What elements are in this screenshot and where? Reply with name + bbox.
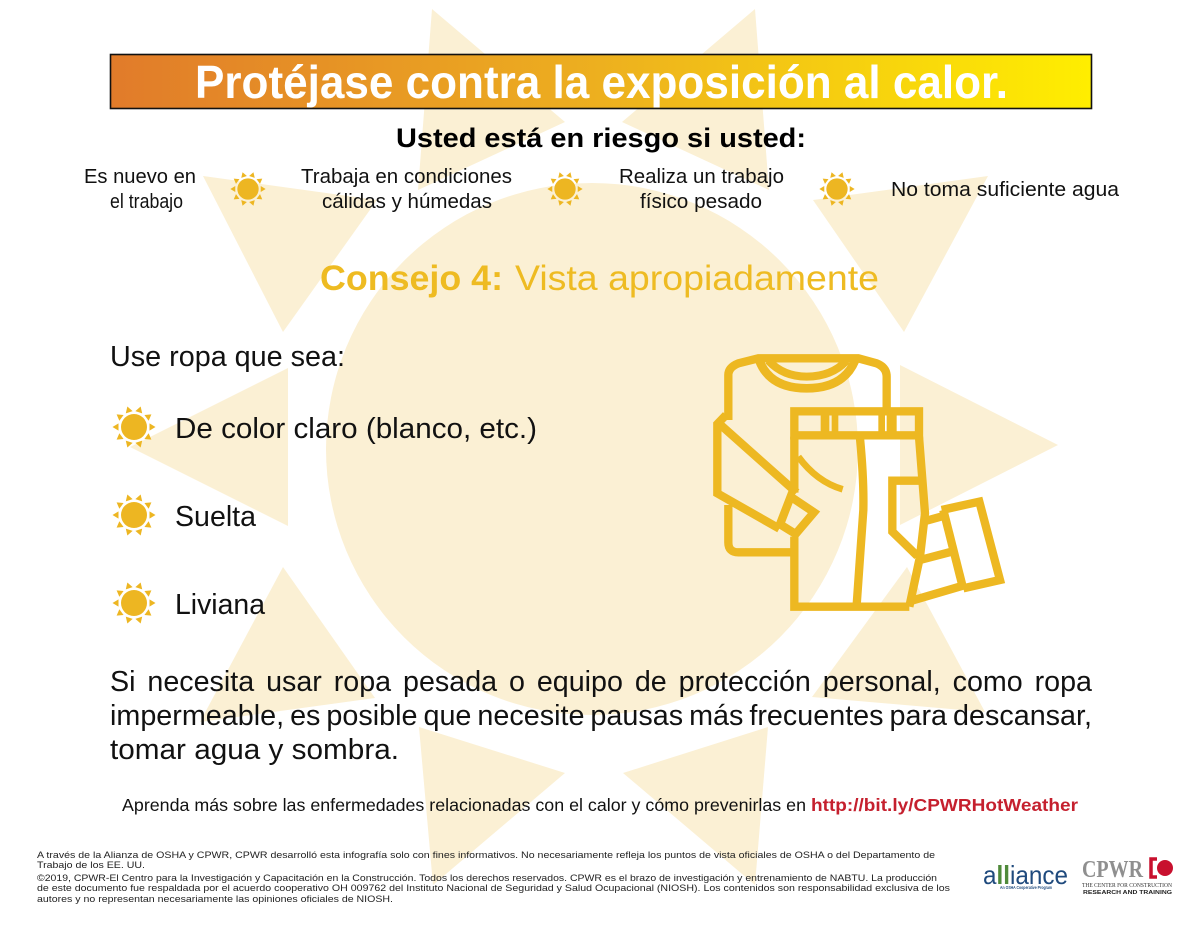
folded garment xyxy=(912,502,1000,601)
list item: light color: De color claro (blanco, etc.) xyxy=(175,413,537,445)
icon: small sun 1 xyxy=(230,171,266,207)
icon: small sun 3 xyxy=(819,171,855,207)
logo: alliance: alliance xyxy=(983,860,1068,890)
link: http://bit.ly/CPWRHotWeather xyxy=(811,795,1078,815)
trousers xyxy=(794,411,925,607)
icon: list sun 3 xyxy=(112,581,156,625)
shirt body xyxy=(717,358,887,552)
list item: loose: Suelta xyxy=(175,501,257,533)
risk factors row xyxy=(84,166,1120,213)
risk: heavy physical work: Realiza un trabajo xyxy=(619,166,784,188)
icon: small sun 2 xyxy=(547,171,583,207)
logo: alliance: An OSHA Cooperative Program xyxy=(1000,885,1052,890)
footer disclaimer xyxy=(37,850,950,904)
footer disclaimer: autores y no representan necesariamente las opiniones oficiales de NIOSH. xyxy=(37,894,393,904)
risk: heavy physical work xyxy=(619,166,784,213)
tip heading: Consejo 4: xyxy=(320,259,503,298)
heavy clothing paragraph: tomar agua y sombra. xyxy=(110,734,399,766)
heavy clothing paragraph: impermeable, es posible que necesite pausas más frecuentes para descansar, xyxy=(110,700,1092,732)
logo: CPWR xyxy=(1082,857,1173,896)
risk: new to the job: el trabajo xyxy=(110,191,183,213)
risk: not enough water: No toma suficiente agua xyxy=(891,179,1120,201)
heavy clothing paragraph: Si necesita usar ropa pesada o equipo de protección personal, como ropa xyxy=(110,666,1093,698)
footer disclaimer: de este documento fue respaldada por el acuerdo cooperativo OH 009762 del Instituto Nacional de Seguridad y Salud Ocupacional (NIOSH). Los contenidos son responsabilidad exclusiva de los xyxy=(37,883,950,893)
risk: hot humid conditions: cálidas y húmedas xyxy=(322,191,492,213)
footer disclaimer: A través de la Alianza de OSHA y CPWR, CPWR desarrolló esta infografía solo con fines informativos. No necesariamente refleja los puntos de vista oficiales de OSHA o del Departamento de xyxy=(37,850,935,860)
risk: hot humid conditions xyxy=(301,166,512,213)
heading: at risk: Usted está en riesgo si usted: xyxy=(396,123,806,153)
intro text: Use ropa que sea: xyxy=(110,341,345,373)
heavy clothing paragraph xyxy=(110,666,1093,766)
logo: CPWR: THE CENTER FOR CONSTRUCTION xyxy=(1082,883,1173,889)
icon: list sun 2 xyxy=(112,493,156,537)
tip heading: Vista apropiadamente xyxy=(515,259,879,298)
background sun watermark xyxy=(130,9,1058,885)
clothing list xyxy=(112,405,537,625)
footer disclaimer: Trabajo de los EE. UU. xyxy=(37,860,145,870)
title text: Protéjase contra la exposición al calor. xyxy=(195,56,1008,108)
logo: CPWR: CPWR xyxy=(1082,857,1144,883)
icon: list sun 1 xyxy=(112,405,156,449)
list item: lightweight: Liviana xyxy=(175,589,266,621)
icon: folded clothes xyxy=(717,358,1000,607)
risk: hot humid conditions: Trabaja en condiciones xyxy=(301,166,512,188)
footer disclaimer: ©2019, CPWR-El Centro para la Investigación y Capacitación en la Construcción. Todos los derechos reservados. CPWR es el brazo de investigación y entrenamiento de NABTU. La producción xyxy=(37,873,937,883)
risk: new to the job: Es nuevo en xyxy=(84,166,196,188)
risk: heavy physical work: físico pesado xyxy=(640,191,762,213)
risk: new to the job xyxy=(84,166,196,213)
learn more line: Aprenda más sobre las enfermedades relacionadas con el calor y cómo prevenirlas en xyxy=(122,795,806,815)
logo: CPWR: RESEARCH AND TRAINING xyxy=(1083,890,1172,896)
tip heading xyxy=(320,259,879,298)
title banner xyxy=(110,54,1092,108)
